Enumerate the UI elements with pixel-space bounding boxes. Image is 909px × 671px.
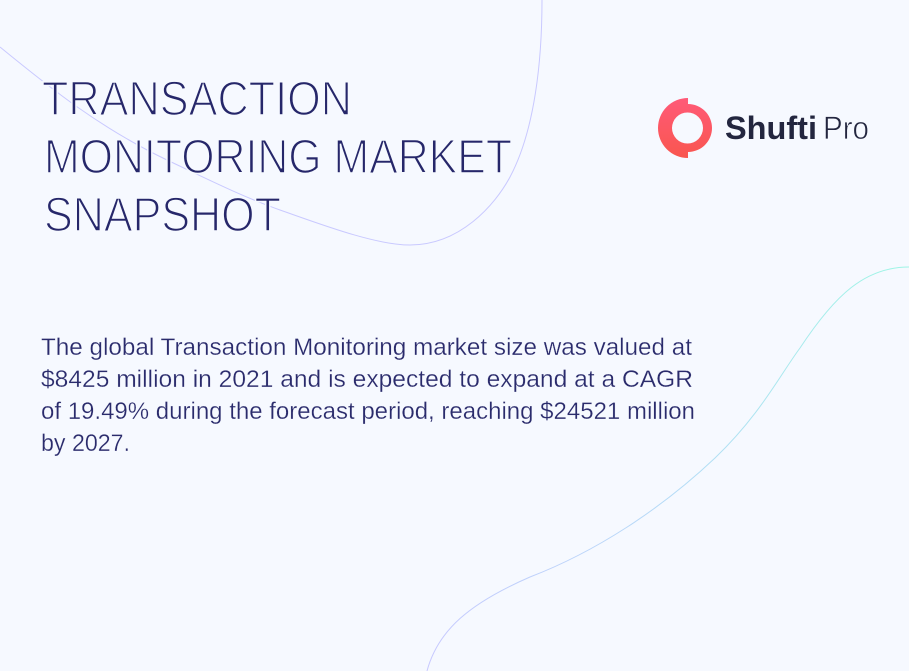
- body text: of 19.49% during the forecast period, reaching $24521 million: [41, 398, 695, 425]
- body text: [41, 334, 695, 457]
- title: TRANSACTION: [42, 73, 352, 126]
- body text: The global Transaction Monitoring market size was valued at: [41, 334, 692, 361]
- logo wordmark light: Pro: [823, 110, 869, 146]
- title: [42, 73, 512, 242]
- decorative curve top: [0, 0, 542, 245]
- decorative curve bottom right: [427, 267, 909, 671]
- logo wordmark: Shufti: [725, 110, 817, 146]
- logo: Shufti Pro: [658, 98, 869, 158]
- body text: by 2027.: [41, 430, 130, 457]
- title: SNAPSHOT: [44, 189, 281, 242]
- body text: $8425 million in 2021 and is expected to expand at a CAGR: [41, 366, 693, 393]
- icon: ring mark: [658, 98, 712, 158]
- title: MONITORING MARKET: [44, 131, 512, 184]
